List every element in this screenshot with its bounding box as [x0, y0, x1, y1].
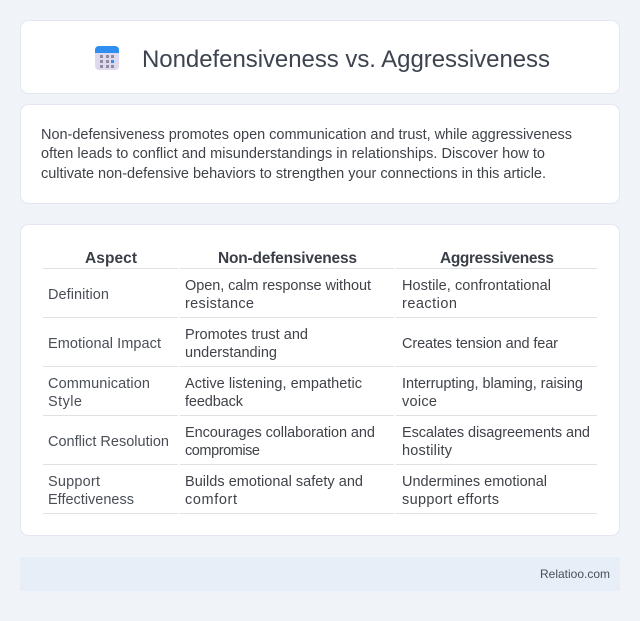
row: conflict resolution — [43, 425, 597, 465]
row: definition: resistance — [185, 296, 254, 312]
row: support effectiveness: comfort — [185, 492, 237, 508]
text block: introduction — [41, 127, 572, 182]
row: support effectiveness: Support — [48, 474, 100, 490]
table header — [43, 250, 597, 269]
row: support effectiveness: Effectiveness — [48, 492, 134, 508]
table header: Non-defensiveness — [218, 250, 357, 267]
text block: introduction: often leads to conflict and misunderstandings in relationships. Discover how to — [41, 146, 545, 162]
row: communication style: voice — [402, 394, 437, 410]
panel: comparison table — [20, 224, 620, 536]
row: conflict resolution: compromise — [185, 443, 260, 459]
row: conflict resolution: hostility — [402, 443, 453, 459]
row: support effectiveness: support efforts — [402, 492, 499, 508]
row: communication style: Interrupting, blaming, raising — [402, 376, 583, 392]
row: definition — [43, 278, 597, 318]
row: communication style: Style — [48, 394, 82, 410]
row: definition: Definition — [48, 287, 109, 303]
footer — [20, 557, 620, 591]
table header: Aspect — [85, 250, 137, 267]
footer credit: Relatioo.com — [540, 567, 610, 581]
row: communication style — [43, 376, 597, 416]
row: definition: Hostile, confrontational — [402, 278, 551, 294]
text block: introduction: Non-defensiveness promotes open communication and trust, while aggressiveness — [41, 127, 572, 143]
row: conflict resolution: Encourages collaboration and — [185, 425, 375, 441]
row: emotional impact: understanding — [185, 345, 277, 361]
row: emotional impact: Promotes trust and — [185, 327, 308, 343]
row: definition: Open, calm response without — [185, 278, 371, 294]
row: conflict resolution: Conflict Resolution — [48, 434, 169, 450]
row: communication style: Active listening, empathetic — [185, 376, 362, 392]
row: emotional impact — [43, 327, 597, 367]
text block: introduction: cultivate non-defensive behaviors to strengthen your connections in this article. — [41, 166, 546, 182]
icon: calendar — [95, 46, 119, 70]
title: Nondefensiveness vs. Aggressiveness — [142, 46, 550, 73]
row: definition: reaction — [402, 296, 457, 312]
row: support effectiveness: Undermines emotional — [402, 474, 547, 490]
row: communication style: Communication — [48, 376, 150, 392]
row: conflict resolution: Escalates disagreements and — [402, 425, 590, 441]
row: emotional impact: Emotional Impact — [48, 336, 161, 352]
row: emotional impact: Creates tension and fear — [402, 336, 558, 352]
row: communication style: feedback — [185, 394, 244, 410]
row: support effectiveness: Builds emotional safety and — [185, 474, 363, 490]
panel: title card — [20, 20, 620, 94]
table header: Aggressiveness — [440, 250, 554, 267]
row: support effectiveness — [43, 474, 597, 514]
panel: introduction — [20, 104, 620, 204]
